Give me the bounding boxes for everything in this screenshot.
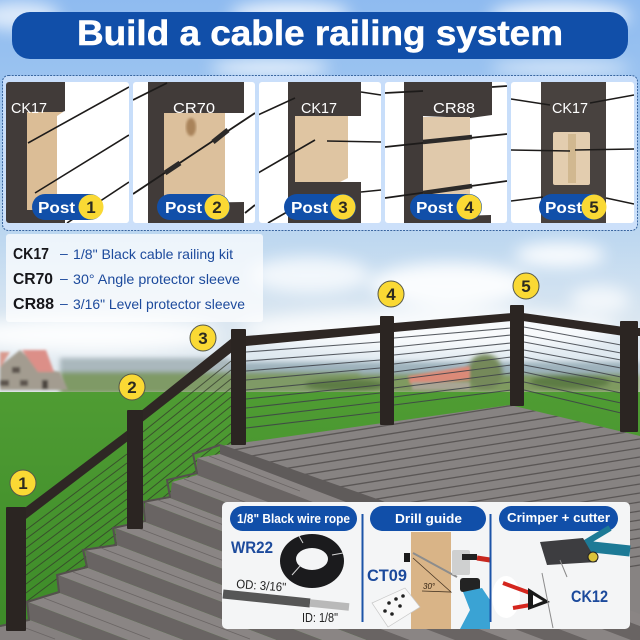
legend: part codes: CR70: [13, 271, 53, 288]
number marker 2: 2: [127, 378, 137, 397]
badge: post 4: 4: [464, 198, 474, 217]
badge: post 3: [284, 194, 356, 220]
badge: post 1: 1: [86, 198, 96, 217]
icon: drill guide jig: [372, 588, 420, 627]
legend: part codes: CK17: [13, 246, 49, 263]
icon: wire rope coil: [280, 534, 344, 588]
heading: crimper and cutter: Crimper + cutter: [507, 510, 610, 525]
number marker 4: [378, 281, 404, 307]
railing: posts: [6, 305, 638, 631]
badge: post 2: [157, 194, 230, 220]
card: post 4: [385, 82, 507, 223]
angle diagram: 30°: [423, 582, 436, 591]
card: post 5: CK17: [552, 100, 588, 117]
badge: post 4: [410, 194, 482, 220]
panel: post detail cards: [2, 76, 638, 230]
cables: level section post 4 to 5: [394, 328, 511, 405]
badge: post 1: Post: [38, 200, 76, 217]
divider line: [362, 514, 364, 622]
heading: wire rope: 1/8" Black wire rope: [237, 511, 350, 526]
badge: post 2: 2: [212, 198, 222, 217]
cables: stair section post 2 to 3: [143, 361, 231, 504]
card: post 4: CR88: [433, 100, 475, 117]
panel: tools and accessories: [222, 502, 630, 629]
icon: cable cross-section: [223, 594, 349, 607]
badge: post 5: [539, 194, 606, 220]
badge: post 2: Post: [165, 200, 203, 217]
legend: part codes: CR88: [13, 296, 54, 313]
icon: cable cutter: [492, 573, 553, 628]
card: post 2: CR70: [173, 100, 215, 117]
legend: part codes: 1/8" Black cable railing kit: [73, 246, 233, 262]
background: blurred red-roofed house: [408, 366, 470, 390]
divider line: [490, 514, 492, 622]
section: crimper and cutter: [492, 506, 630, 628]
background: farmhouse on the left: [0, 350, 68, 390]
deck fascia edge: [220, 444, 440, 540]
badge: post 3: Post: [291, 200, 329, 217]
background: distant hills and trees: [60, 354, 640, 394]
number marker 2: [119, 374, 145, 400]
number marker 4: 4: [386, 285, 396, 304]
icon: drill bit and clamp: [404, 550, 490, 577]
railing: top rails: [22, 313, 640, 522]
card: post 5: [511, 82, 634, 223]
wood post: [411, 532, 451, 629]
label: outer diameter: OD: 3/16": [236, 577, 287, 594]
badge: post 3: 3: [338, 198, 348, 217]
cables: stair section post 1 to 2: [26, 454, 127, 602]
legend: part codes: 30° Angle protector sleeve: [73, 271, 240, 287]
background: green lawn: [0, 392, 640, 640]
badge: post 1: [32, 194, 104, 220]
badge: post 5: Post: [545, 200, 583, 217]
number marker 3: 3: [198, 329, 208, 348]
legend: part codes: –: [60, 295, 68, 311]
legend: part codes: 3/16" Level protector sleeve: [73, 296, 245, 312]
cables: level section post 5 to 6: [524, 327, 621, 413]
deck surface: [220, 385, 640, 640]
card: post 2: [133, 82, 255, 223]
legend: part codes: –: [60, 245, 68, 261]
badge: post 5: 5: [589, 198, 599, 217]
cables: level section post 3 to 4: [246, 342, 380, 428]
title banner: [12, 12, 628, 59]
title banner: Build a cable railing system: [77, 14, 563, 53]
code: CT09: CT09: [367, 566, 407, 585]
stairs: [0, 445, 640, 640]
section: drill guide: [367, 506, 490, 629]
code: WR22: WR22: [231, 538, 273, 557]
legend: part codes: –: [60, 270, 68, 286]
number marker 1: [10, 470, 36, 496]
card: post 3: CK17: [301, 100, 337, 117]
section: wire rope: [223, 506, 357, 625]
icon: drill: [460, 578, 490, 629]
label: inner diameter: ID: 1/8": [302, 611, 338, 625]
legend: part codes: [6, 234, 263, 322]
background: sky with clouds: [0, 0, 640, 400]
number marker 5: [513, 273, 539, 299]
card: post 1: CK17: [11, 100, 47, 117]
badge: post 4: Post: [416, 200, 454, 217]
card: post 3: [258, 82, 381, 223]
number marker 3: [190, 325, 216, 351]
number marker 5: 5: [521, 277, 531, 296]
icon: hydraulic crimper: [540, 528, 630, 577]
heading: drill guide: Drill guide: [395, 511, 462, 526]
card: post 1: [6, 82, 129, 223]
code: CK12: CK12: [571, 587, 608, 606]
number marker 1: 1: [18, 474, 28, 493]
